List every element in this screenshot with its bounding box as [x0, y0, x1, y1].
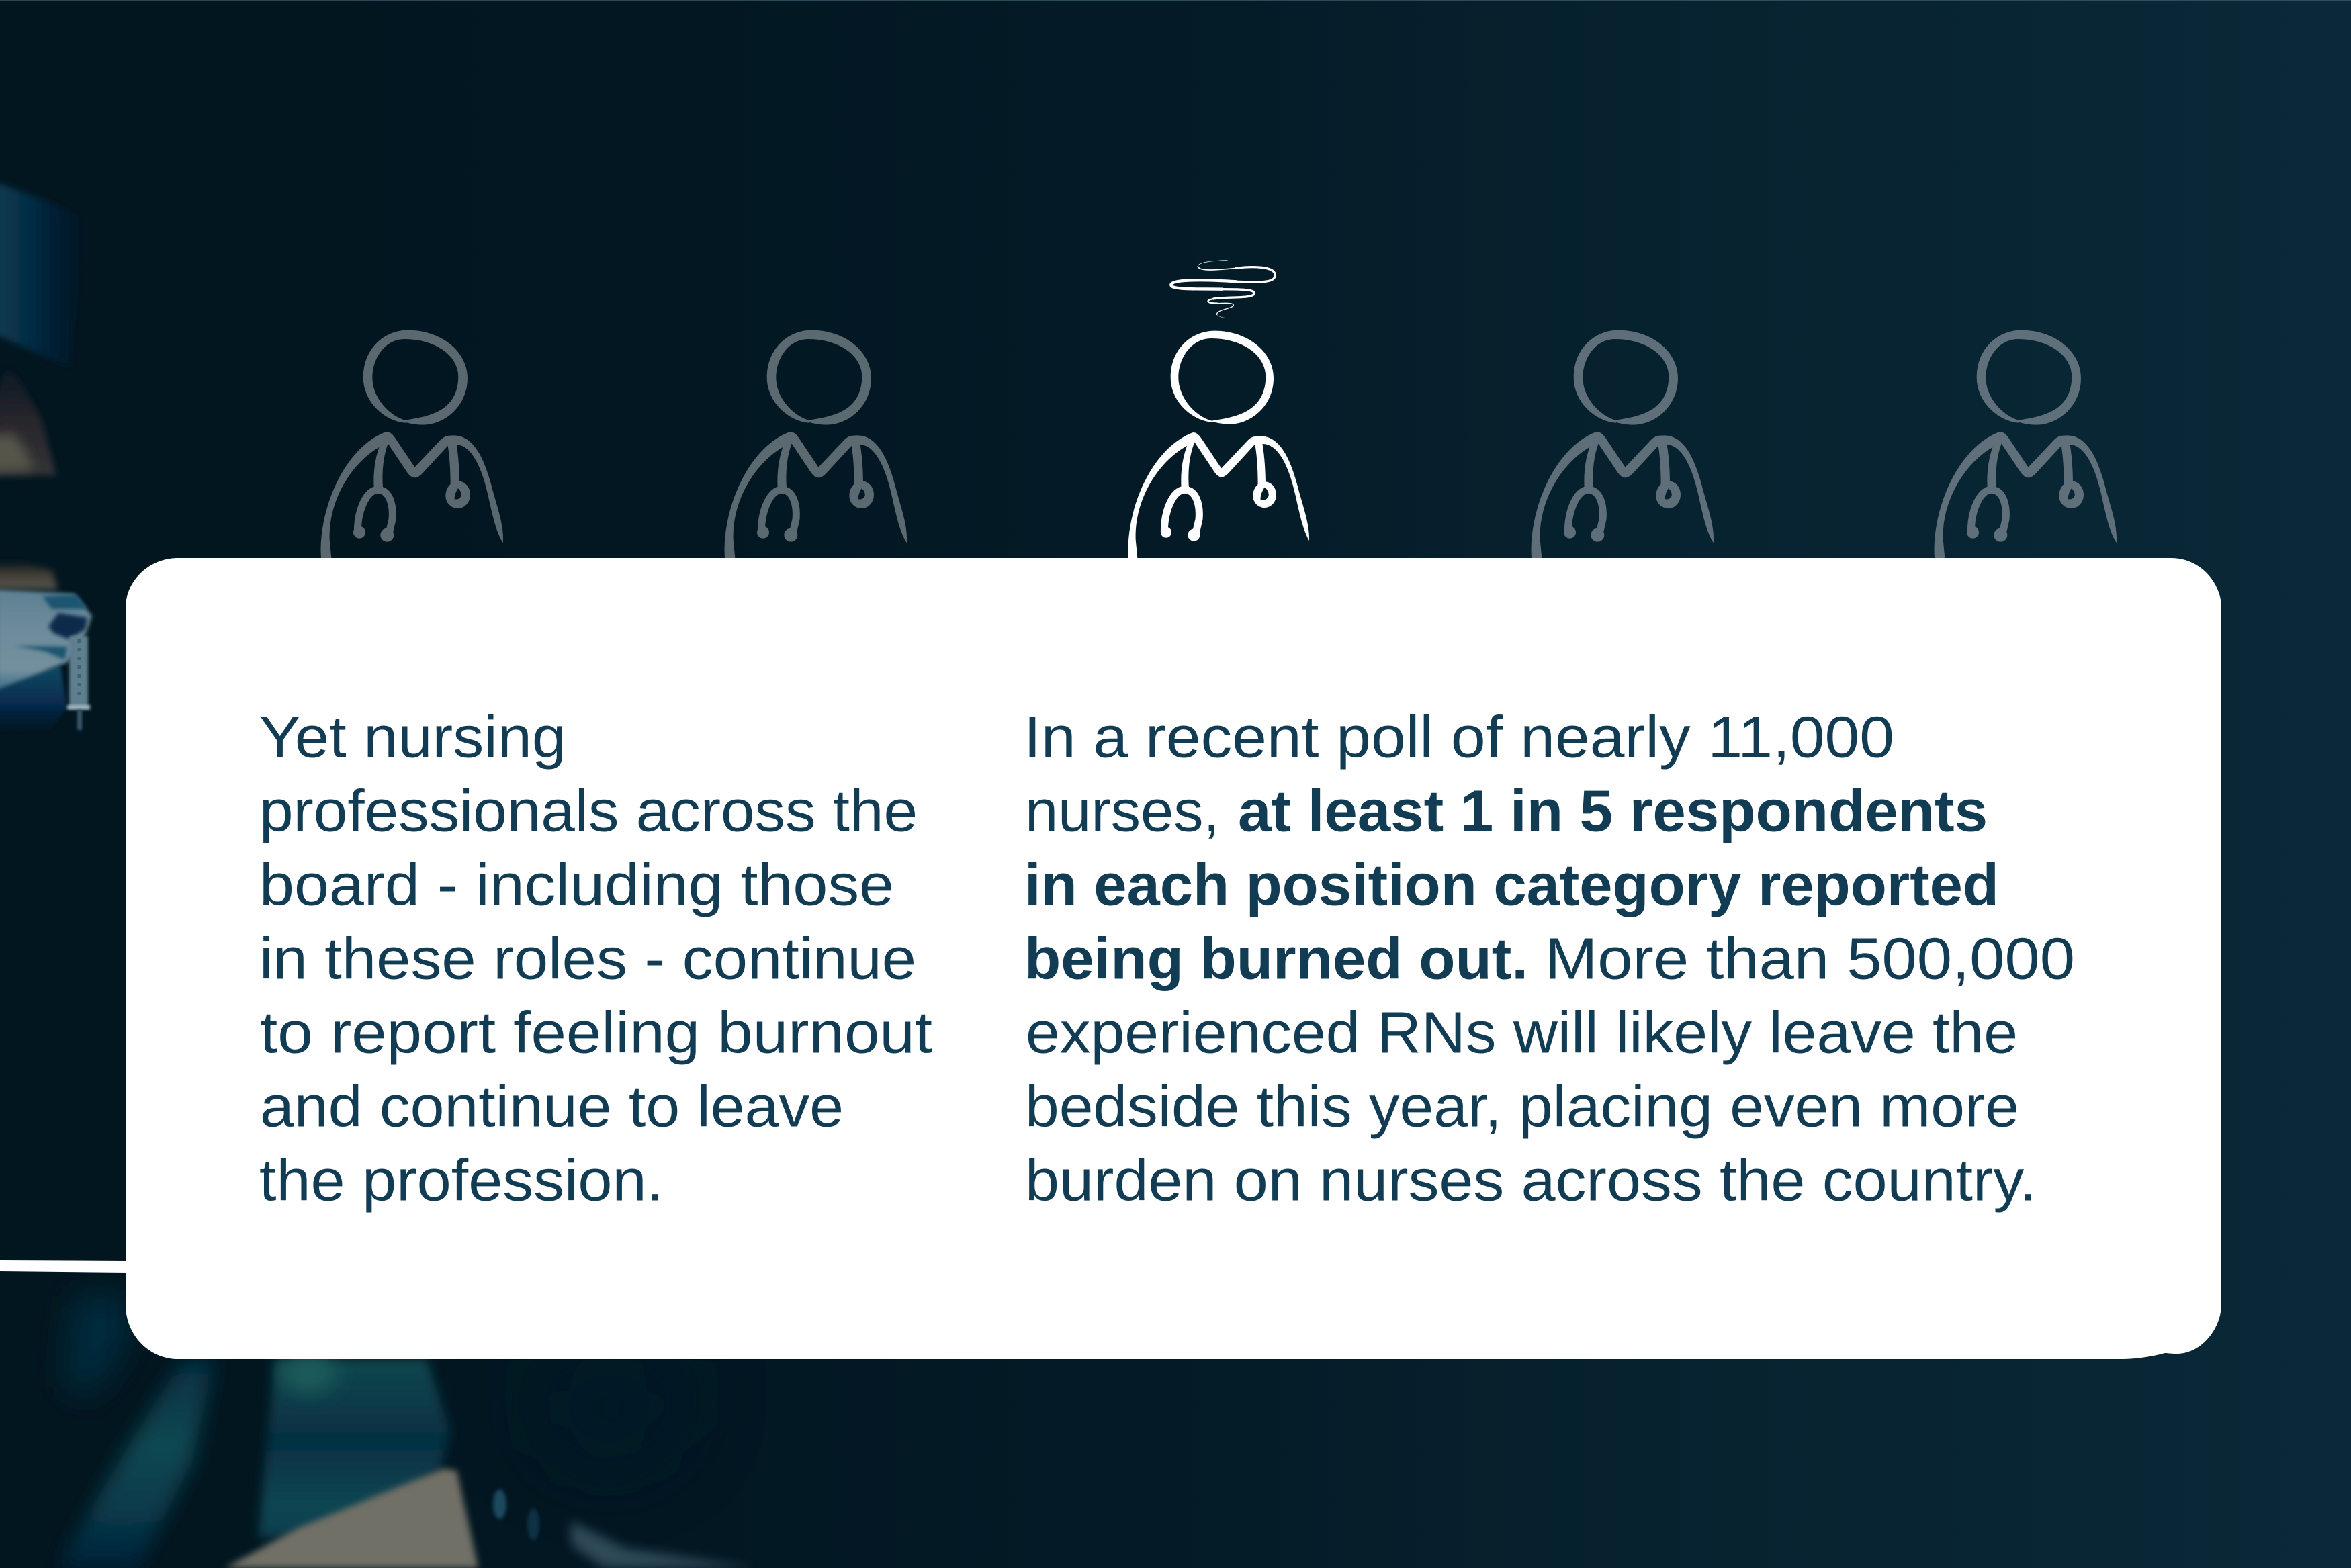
text block: right column: experienced RNs will likely leave the [1026, 1001, 2018, 1065]
photo: cheek skin [0, 561, 58, 590]
text block: right column: being burned out. [1024, 927, 1528, 991]
photo: mask hollow [48, 613, 87, 639]
photo: surgical mask lower blue [0, 665, 67, 735]
icon: scribble above head [1171, 260, 1275, 318]
photo: teal fabric fold one [57, 1359, 215, 1568]
photo: teal highlight [281, 1353, 337, 1393]
text block: left column: the profession. [259, 1148, 664, 1213]
photo: left sleeve glow [64, 1296, 128, 1397]
photo: surgical mask folds [0, 590, 92, 690]
photo: forehead skin shadow [0, 367, 56, 475]
photo: navy shadow [531, 1359, 685, 1471]
text block: left column: board - including those [259, 853, 894, 917]
text block: left column [259, 705, 932, 1213]
photo: blurred surgical cap [0, 181, 84, 368]
text block: right column: More than 500,000 [1545, 927, 2075, 991]
photo: mask ear strap [67, 636, 90, 730]
photo: skin triangle [225, 1469, 478, 1568]
photo: teal fabric fold two [259, 1359, 450, 1538]
text block: right column: at least 1 in 5 respondents [1238, 779, 1988, 843]
photo: mask dark fold [15, 646, 67, 660]
icon: nurse figure 1 [322, 331, 502, 558]
text block: left column: and continue to leave [260, 1074, 844, 1139]
icon: highlighted burned-out nurse figure [1128, 260, 1309, 558]
connector line [0, 1260, 128, 1273]
photo: forehead skin highlight [0, 433, 34, 473]
photo: small blue reflection [493, 1489, 506, 1519]
panel: white text card [126, 558, 2221, 1359]
photo: blurred glove [571, 1521, 756, 1568]
text block: left column: professionals across the [259, 779, 918, 843]
icon: nurse figure 2 [725, 331, 906, 558]
text block: left column: Yet nursing [259, 705, 566, 770]
text block: right column [1024, 705, 2075, 1213]
icon: nurse figure 4 [1532, 331, 1713, 558]
text block: right column: bedside this year, placing even more [1025, 1074, 2019, 1139]
icon: nurse figure 5 [1935, 331, 2116, 558]
photo: small blue reflection two [527, 1508, 539, 1540]
text block: right column: nurses, [1025, 779, 1220, 843]
text block: right column: In a recent poll of nearly 11,000 [1024, 705, 1894, 770]
text block: left column: to report feeling burnout [260, 1001, 932, 1065]
text block: left column: in these roles - continue [259, 927, 916, 991]
text block: right column: burden on nurses across the country. [1025, 1148, 2037, 1213]
photo: mask upper blue wedge [42, 594, 87, 609]
text block: right column: in each position category reported [1024, 853, 1999, 917]
